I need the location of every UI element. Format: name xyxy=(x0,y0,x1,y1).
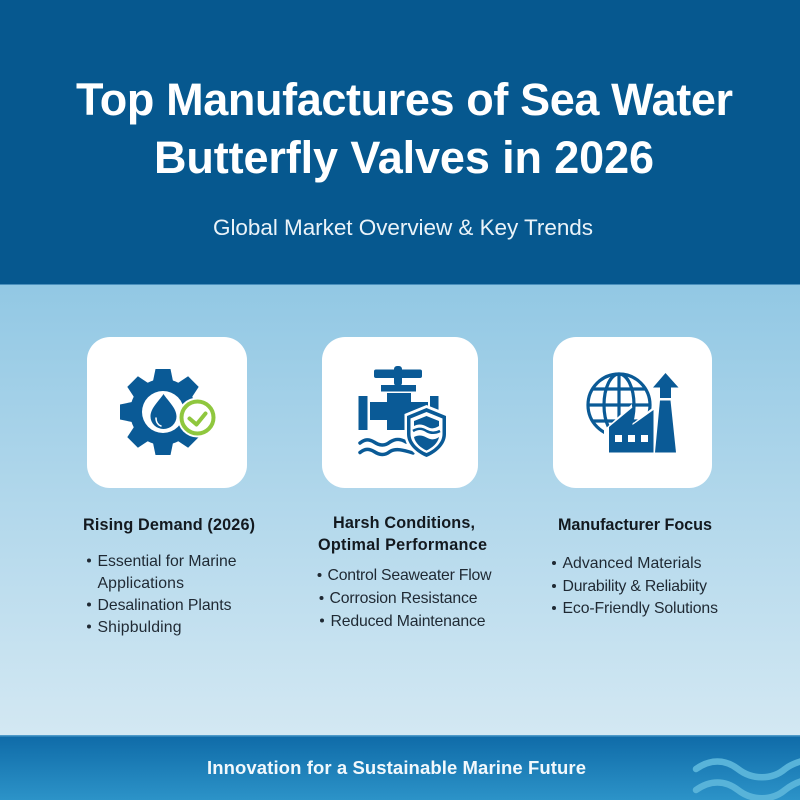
card: manufacturer focus icon xyxy=(553,337,712,488)
list: manufacturer focus: Advanced Materials xyxy=(562,555,702,572)
list: rising demand xyxy=(87,553,237,636)
title: Butterfly Valves in 2026 xyxy=(154,132,654,183)
list: rising demand: Shipbulding xyxy=(98,619,182,636)
heading: harsh conditions: Optimal Performance xyxy=(318,536,487,554)
icon: valve with shield and waves xyxy=(358,366,449,460)
list: rising demand: Applications xyxy=(98,575,184,592)
card: rising demand icon xyxy=(87,337,247,488)
list: harsh conditions: Reduced Maintenance xyxy=(330,613,486,630)
icon: footer waves xyxy=(696,761,800,798)
list: manufacturer focus: Durability & Reliabiity xyxy=(562,578,707,595)
heading: harsh conditions xyxy=(318,514,487,554)
title: Top Manufactures of Sea Water xyxy=(76,74,733,125)
heading: manufacturer focus: Manufacturer Focus xyxy=(558,516,712,534)
panel: manufacturer focus xyxy=(552,337,718,617)
list: rising demand: Essential for Marine xyxy=(98,553,237,570)
panel: rising demand xyxy=(83,337,255,636)
subtitle: Global Market Overview & Key Trends xyxy=(213,215,593,240)
list: manufacturer focus: Eco-Friendly Solutions xyxy=(562,600,718,617)
panel: footer xyxy=(0,735,800,800)
panel: body background xyxy=(0,285,800,736)
list: harsh conditions xyxy=(318,567,492,630)
list: harsh conditions: Corrosion Resistance xyxy=(330,590,478,607)
title xyxy=(76,74,733,183)
footer tagline: Innovation for a Sustainable Marine Future xyxy=(207,757,586,778)
heading: rising demand: Rising Demand (2026) xyxy=(83,516,255,534)
card: harsh conditions icon xyxy=(322,337,478,488)
list: manufacturer focus xyxy=(552,555,718,617)
panel: harsh conditions xyxy=(318,337,492,630)
heading: harsh conditions: Harsh Conditions, xyxy=(333,514,475,532)
icon: globe, factory and arrow xyxy=(588,373,678,461)
icon: gear with water drop and check xyxy=(120,369,218,455)
list: rising demand: Desalination Plants xyxy=(98,597,232,614)
panel: header xyxy=(0,0,800,285)
list: harsh conditions: Control Seaweater Flow xyxy=(328,567,492,584)
